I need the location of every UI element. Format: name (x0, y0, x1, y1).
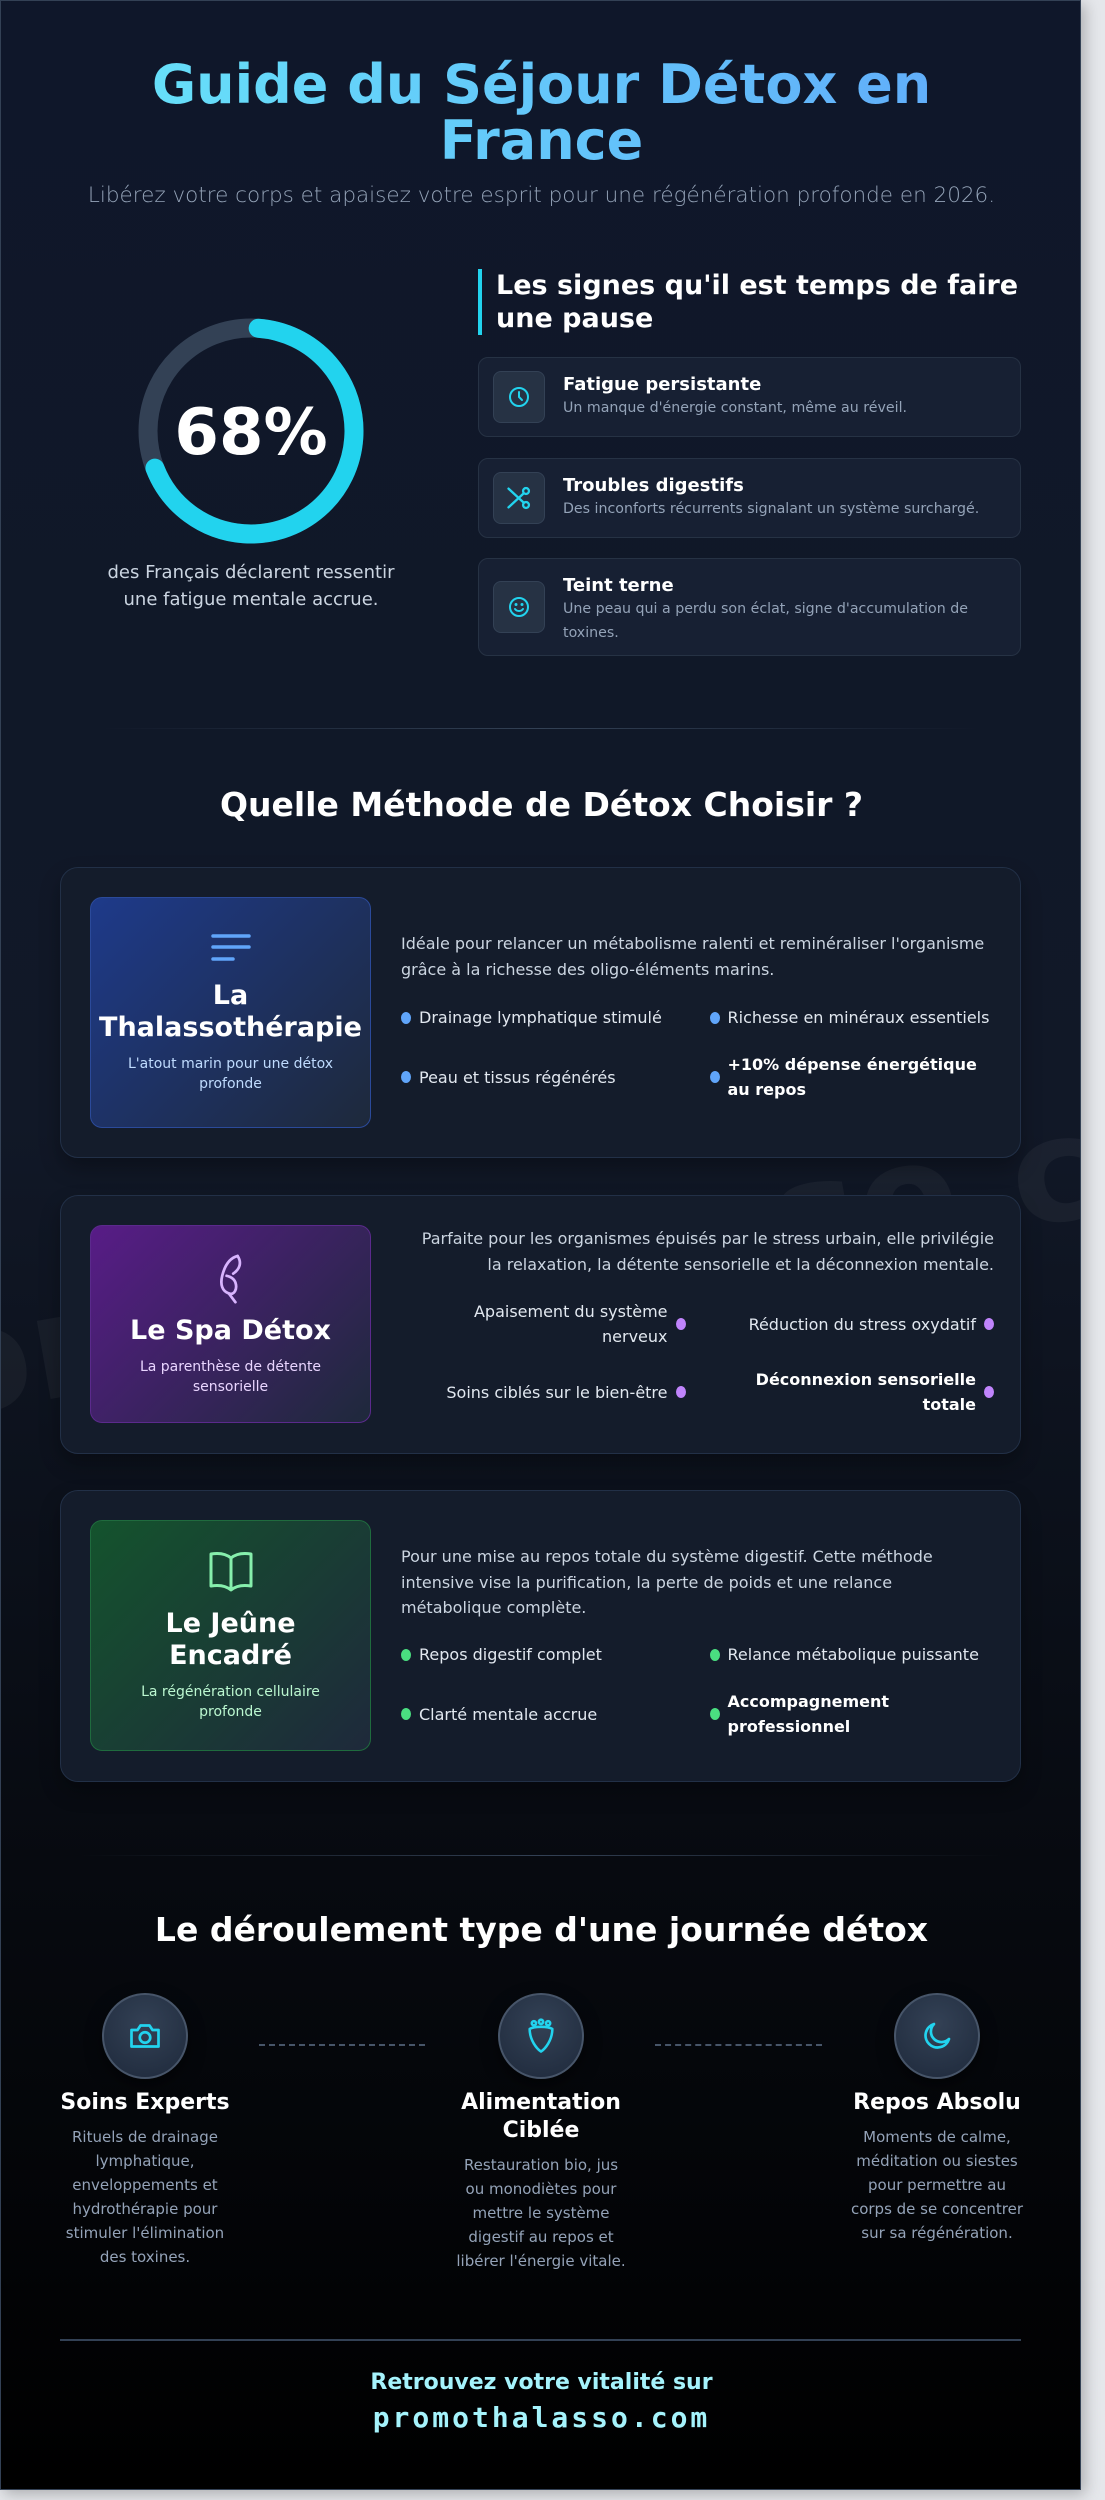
arrow: dashed connector 1 (259, 2044, 425, 2046)
spa header box (90, 1225, 371, 1423)
sign card: digestif: Troubles digestifs (563, 475, 744, 496)
title: France (440, 109, 643, 172)
spa benefits: Soins ciblés sur le bien-être (446, 1382, 668, 1402)
spa benefits: Réduction du stress oxydatif (749, 1314, 976, 1334)
icon: clock (493, 371, 545, 423)
spa benefits: Déconnexion sensorielle (756, 1370, 976, 1389)
stat caption: des Français déclarent ressentir une fatigue mentale accrue. (108, 562, 394, 610)
jeune benefits: Repos digestif complet (419, 1645, 602, 1664)
step: alimentation ciblée: Restauration bio, jus ou monodiètes pour mettre le système digestif au repos et libérer l'énergie vitale. (456, 2156, 626, 2270)
jeune header box: Encadré (169, 1640, 292, 1670)
title: Guide du Séjour Détox en (152, 53, 931, 116)
thalasso benefits (401, 1008, 989, 1099)
signs heading: Les signes qu'il est temps de faire une pause (496, 270, 1018, 334)
footer call to action (370, 2370, 713, 2434)
footer call to action: promothalasso.com (373, 2401, 710, 2434)
thalasso description: Idéale pour relancer un métabolisme ralenti et reminéraliser l'organisme grâce à la richesse des oligo-éléments marins. (401, 934, 984, 979)
spa benefits: Apaisement du système (474, 1302, 668, 1321)
title (1, 57, 1082, 169)
step: alimentation ciblée: Alimentation (461, 2090, 621, 2115)
jeune benefits: Clarté mentale accrue (419, 1704, 597, 1724)
panel: thalassothérapie (60, 867, 1021, 1158)
jeune header box: La régénération cellulaire profonde (141, 1684, 320, 1720)
jeune benefits (401, 1645, 979, 1736)
step: soins experts: Soins Experts (60, 2090, 230, 2115)
spa header box: Le Spa Détox (130, 1315, 331, 1346)
icon: moon (894, 1993, 980, 2079)
jeune benefits: Accompagnement professionnel (728, 1692, 889, 1736)
jeune header box (90, 1520, 371, 1751)
spa benefits: nerveux (602, 1327, 668, 1346)
thalasso benefits: Peau et tissus régénérés (419, 1068, 616, 1086)
step: repos absolu: Moments de calme, méditation ou siestes pour permettre au corps de se concentrer sur sa régénération. (851, 2128, 1023, 2242)
step: soins experts (60, 1993, 230, 2266)
panel: spa détox (60, 1195, 1021, 1454)
icon: feather (220, 1254, 242, 1304)
spa header box: La parenthèse de détente sensorielle (140, 1359, 321, 1395)
step: repos absolu (851, 1993, 1024, 2242)
step: alimentation ciblée (456, 1993, 626, 2270)
thalasso header box: Thalassothérapie (99, 1012, 362, 1042)
sign card: teint: Teint terne (563, 575, 674, 596)
thalasso header box: L'atout marin pour une détox profonde (128, 1056, 333, 1092)
step: repos absolu: Repos Absolu (853, 2090, 1021, 2115)
step: alimentation ciblée: Ciblée (503, 2118, 579, 2143)
jeune benefits: Relance métabolique puissante (728, 1645, 979, 1664)
sign card: fatigue (478, 357, 1021, 437)
icon: waves (211, 934, 251, 961)
sign card: digestif (478, 458, 1021, 538)
thalasso benefits: Drainage lymphatique stimulé (419, 1008, 662, 1027)
sign card: digestif: Des inconforts récurrents signalant un système surchargé. (563, 501, 979, 517)
arrow: dashed connector 2 (655, 2044, 822, 2046)
step: soins experts: Rituels de drainage lymphatique, enveloppements et hydrothérapie pour stimuler l'élimination des toxines. (66, 2128, 224, 2266)
icon: book (210, 1552, 252, 1592)
jeune description: Pour une mise au repos totale du système digestif. Cette méthode intensive vise la purification, la perte de poids et une relance métabolique complète. (401, 1547, 933, 1617)
thalasso header box (90, 897, 371, 1128)
sign card: fatigue: Fatigue persistante (563, 374, 761, 395)
icon: camera (102, 1993, 188, 2079)
icon: smiley (493, 581, 545, 633)
spa benefits (446, 1302, 994, 1414)
jeune header box: Le Jeûne (165, 1608, 296, 1638)
spa description: Parfaite pour les organismes épuisés par le stress urbain, elle privilégie la relaxation, la détente sensorielle et la déconnexion mentale. (422, 1229, 994, 1274)
heading: méthodes: Quelle Méthode de Détox Choisir ? (220, 785, 863, 824)
heading: journée type: Le déroulement type d'une journée détox (155, 1910, 928, 1949)
panel: jeûne encadré (60, 1490, 1021, 1782)
icon: scissors (493, 472, 545, 524)
subtitle: Libérez votre corps et apaisez votre esprit pour une régénération profonde en 2026. (88, 183, 995, 208)
spa benefits: totale (923, 1395, 976, 1414)
sign card: fatigue: Un manque d'énergie constant, même au réveil. (563, 400, 907, 416)
stat ring: 68%: 68% (174, 396, 328, 470)
stat ring: 68% (138, 318, 364, 544)
thalasso benefits: +10% dépense énergétique au repos (728, 1055, 977, 1099)
thalasso header box: La (213, 980, 248, 1010)
sign card: teint: Une peau qui a perdu son éclat, signe d'accumulation de toxines. (563, 601, 968, 641)
thalasso benefits: Richesse en minéraux essentiels (728, 1008, 989, 1027)
footer call to action: Retrouvez votre vitalité sur (370, 2370, 713, 2395)
sign card: teint (478, 558, 1021, 656)
icon: strawberry (498, 1993, 584, 2079)
